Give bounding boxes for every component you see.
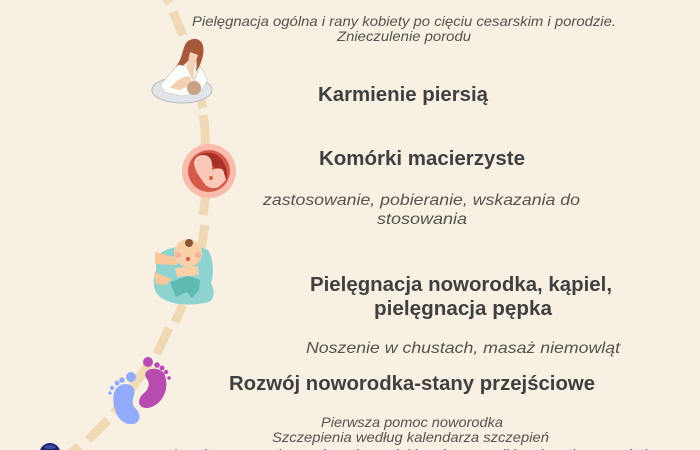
blue foot xyxy=(108,372,140,424)
text: postpartum care: Pielęgnacja ogólna i rany kobiety po cięciu cesarskim i porodzie. xyxy=(192,13,616,29)
nursing pillow xyxy=(152,77,212,103)
dashed timeline path xyxy=(68,0,206,450)
water xyxy=(154,246,214,305)
text: postpartum care: Znieczulenie porodu xyxy=(336,28,471,44)
text: stem cell details xyxy=(262,192,580,228)
text: first aid and vaccinations: Pierwsza pomoc noworodka xyxy=(321,414,503,430)
heading: breastfeeding: Karmienie piersią xyxy=(318,84,489,106)
mother's shirt xyxy=(160,65,208,96)
text: stem cell details: stosowania xyxy=(377,211,467,228)
baby's cheeks and mouth xyxy=(175,252,181,258)
icon: breastfeeding mother xyxy=(152,39,212,103)
text: first aid and vaccinations xyxy=(169,414,655,450)
purple foot xyxy=(139,357,171,408)
text: stem cell details: zastosowanie, pobieranie, wskazania do xyxy=(262,192,580,209)
text: first aid and vaccinations: Szczepienia według kalendarza szczepień xyxy=(272,429,549,445)
text: babywearing and massage: Noszenie w chustach, masaż niemowląt xyxy=(306,340,621,357)
mother's hair xyxy=(176,39,203,72)
embryo body xyxy=(194,155,226,188)
heading: newborn care: pielęgnacja pępka xyxy=(374,298,553,320)
heading: newborn care: Pielęgnacja noworodka, kąpiel, xyxy=(310,274,612,296)
heading: stem cells: Komórki macierzyste xyxy=(319,148,525,170)
baby's head xyxy=(187,81,201,95)
icon: dark blue dome, cropped xyxy=(39,443,61,450)
mother's skin xyxy=(187,52,198,80)
icon: baby feet xyxy=(108,357,171,424)
icon: embryo in womb xyxy=(182,144,236,198)
baby's head xyxy=(174,239,202,267)
parent's arms xyxy=(155,252,178,265)
heading: newborn development: Rozwój noworodka-stany przejściowe xyxy=(229,373,595,395)
submerged body xyxy=(170,276,200,298)
heading: newborn care xyxy=(310,274,612,320)
text: postpartum care xyxy=(192,13,616,44)
icon: baby bathing xyxy=(154,239,214,305)
baby's torso xyxy=(175,266,199,277)
